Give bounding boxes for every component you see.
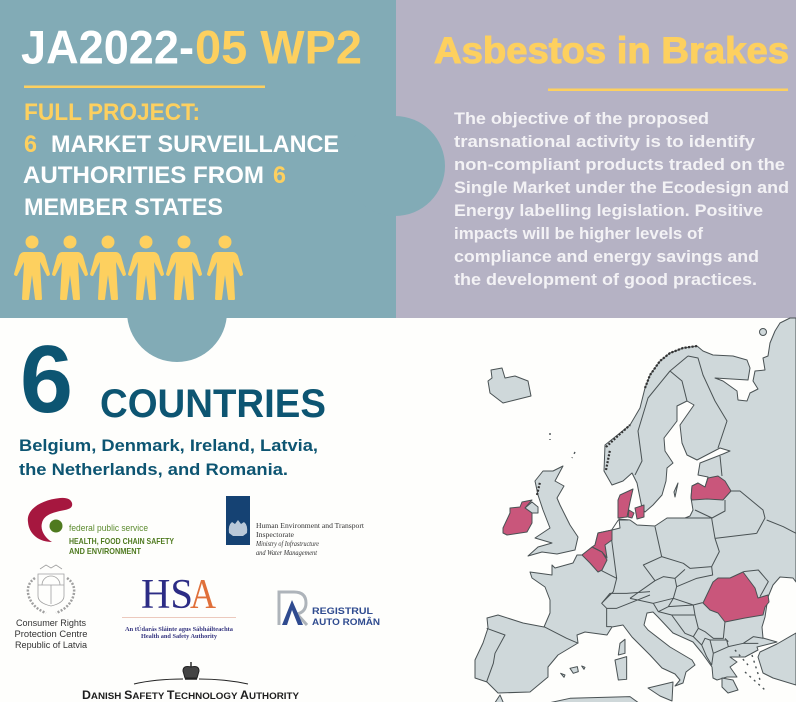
logo: Consumer Rights Protection Centre Latvia: Consumer Rights [16,618,86,628]
logo: Human Environment and Transport Inspectorate: Human Environment and Transport [256,521,364,530]
logo: Human Environment and Transport Inspectorate [226,496,364,557]
map: Peloponnese [722,678,738,693]
title: JA2022-05 WP2: 05 WP2 [195,20,362,74]
text block: country list: Belgium, Denmark, Ireland, Latvia, [19,436,318,455]
heading: full project [23,99,339,221]
map: Latvia [691,476,731,500]
map of Europe [475,318,796,702]
map: Northern Ireland [525,502,538,513]
logo: HSA: An tÚdarás Sláinte agus Sábháilteachta [125,625,234,633]
text block: objective: Single Market under the Ecodesign and [454,178,789,197]
logo: Registrul Auto Roman [279,592,380,628]
logo: HSA: Health and Safety Authority [141,633,218,640]
connector bump [345,116,445,216]
logo: Consumer Rights Protection Centre Latvia: Protection Centre [14,629,88,639]
icon: six people [14,236,243,300]
logo: HSA: A [190,572,217,618]
map: islands in crop coordinates [495,639,638,702]
heading: full project: MARKET SURVEILLANCE [51,131,339,158]
map: mainland [475,318,796,693]
map: Iceland [488,368,531,403]
title underline [24,86,265,88]
text block: objective: compliance and energy savings and [454,247,759,266]
logo: Human Environment and Transport Inspectorate: Ministry of Infrastructure [255,539,320,548]
text block: objective: Energy labelling legislation. Positive [454,201,763,220]
logo: Consumer Rights Protection Centre Latvia [14,565,88,650]
heading: full project: AUTHORITIES FROM [23,162,264,189]
heading underline [548,88,788,91]
logo: Registrul Auto Roman: REGISTRUL [312,606,373,617]
map: Ireland [503,500,532,535]
heading: full project: 6 [24,131,37,158]
heading: Asbestos in Brakes: Asbestos in Brakes [434,30,789,71]
map: Turkey [758,633,796,685]
logo: Human Environment and Transport Inspectorate: Inspectorate [256,530,294,539]
map: Gotland and Arctic islet [674,328,766,497]
map: Romania [703,572,769,622]
map: Denmark [618,489,644,519]
logo: Registrul Auto Roman: AUTO ROMÂN [312,616,380,628]
text block: objective: The objective of the proposed [454,109,709,128]
text block: objective: non-compliant products traded on the [454,155,785,174]
text block: objective: the development of good practices. [454,270,757,289]
text block: country list: the Netherlands, and Romania. [19,460,288,479]
heading: full project: FULL PROJECT: [24,99,200,126]
map: central and eastern borders [630,491,796,665]
text block: objective: impacts will be higher levels of [454,224,703,243]
logo: Belgian federal public service: HEALTH, FOOD CHAIN SAFETY [69,536,174,546]
logo: Danish Safety Technology Authority [82,662,300,702]
map: Sicily [648,682,673,701]
map: Great Britain [528,466,578,556]
map: Greek islets [550,433,765,690]
text block: country list [19,436,318,479]
text block: objective: transnational activity is to identify [454,132,756,151]
logo: Belgian federal public service [28,498,174,556]
logo: Belgian federal public service: federal public service [69,523,148,534]
logo: Belgian federal public service: AND ENVIRONMENT [69,546,142,556]
logo: Consumer Rights Protection Centre Latvia: Republic of Latvia [15,640,87,650]
heading: full project: MEMBER STATES [24,194,223,221]
logo: Danish Safety Technology Authority: DANISH SAFETY TECHNOLOGY AUTHORITY [82,688,300,702]
map: fjord coast detail [537,346,697,495]
panel: project summary [0,0,396,362]
logo: HSA [122,572,236,640]
title: JA2022-05 WP2: JA2022- [21,20,194,74]
map: western borders [487,520,650,682]
heading: 6 countries: 6 [20,326,73,433]
panel: objective [396,0,796,318]
heading: 6 countries: COUNTRIES [100,382,326,426]
logo: Human Environment and Transport Inspectorate: and Water Management [256,548,318,557]
title: JA2022-05 WP2 [21,20,362,74]
text block: objective [454,109,789,289]
logo: HSA: HS [141,572,193,618]
map: northern borders [635,356,727,518]
heading: full project: 6 [273,162,286,189]
map: Netherlands [592,530,612,558]
heading: 6 countries [20,326,326,433]
map: Belgium [582,547,607,572]
